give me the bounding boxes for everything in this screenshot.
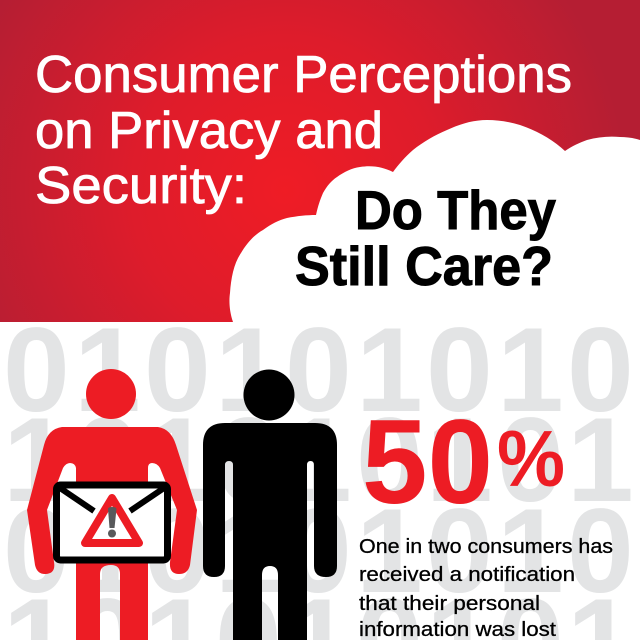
title: Security:	[35, 157, 247, 215]
black head	[244, 370, 294, 420]
black person	[203, 370, 337, 640]
red banner	[0, 0, 640, 322]
background binary digits: 010101010	[3, 303, 634, 437]
icon: envelope	[56, 485, 168, 560]
background binary digits: 010101010	[3, 484, 634, 618]
header panel	[0, 0, 640, 322]
subtitle: Do They	[355, 179, 556, 241]
statistic description: One in two consumers has	[359, 536, 613, 558]
red body	[27, 427, 197, 640]
title	[35, 46, 572, 215]
title: Consumer Perceptions	[35, 46, 572, 104]
statistic: 50%	[362, 395, 565, 529]
statistic description: received a notification	[359, 564, 575, 586]
statistic description	[359, 536, 613, 640]
statistic: 50%: %	[497, 414, 565, 503]
background binary digits: 101010101	[3, 393, 634, 527]
cloud	[229, 120, 640, 322]
background binary digits	[3, 303, 634, 640]
statistic description: that their personal	[359, 593, 540, 615]
subtitle	[295, 179, 556, 297]
statistic: 50%: 50	[362, 395, 493, 529]
icon: warning triangle	[85, 498, 139, 543]
subtitle: Still Care?	[295, 235, 553, 297]
red head	[86, 369, 136, 419]
title: on Privacy and	[35, 102, 383, 160]
red person with envelope	[27, 369, 197, 640]
black body	[203, 423, 337, 640]
